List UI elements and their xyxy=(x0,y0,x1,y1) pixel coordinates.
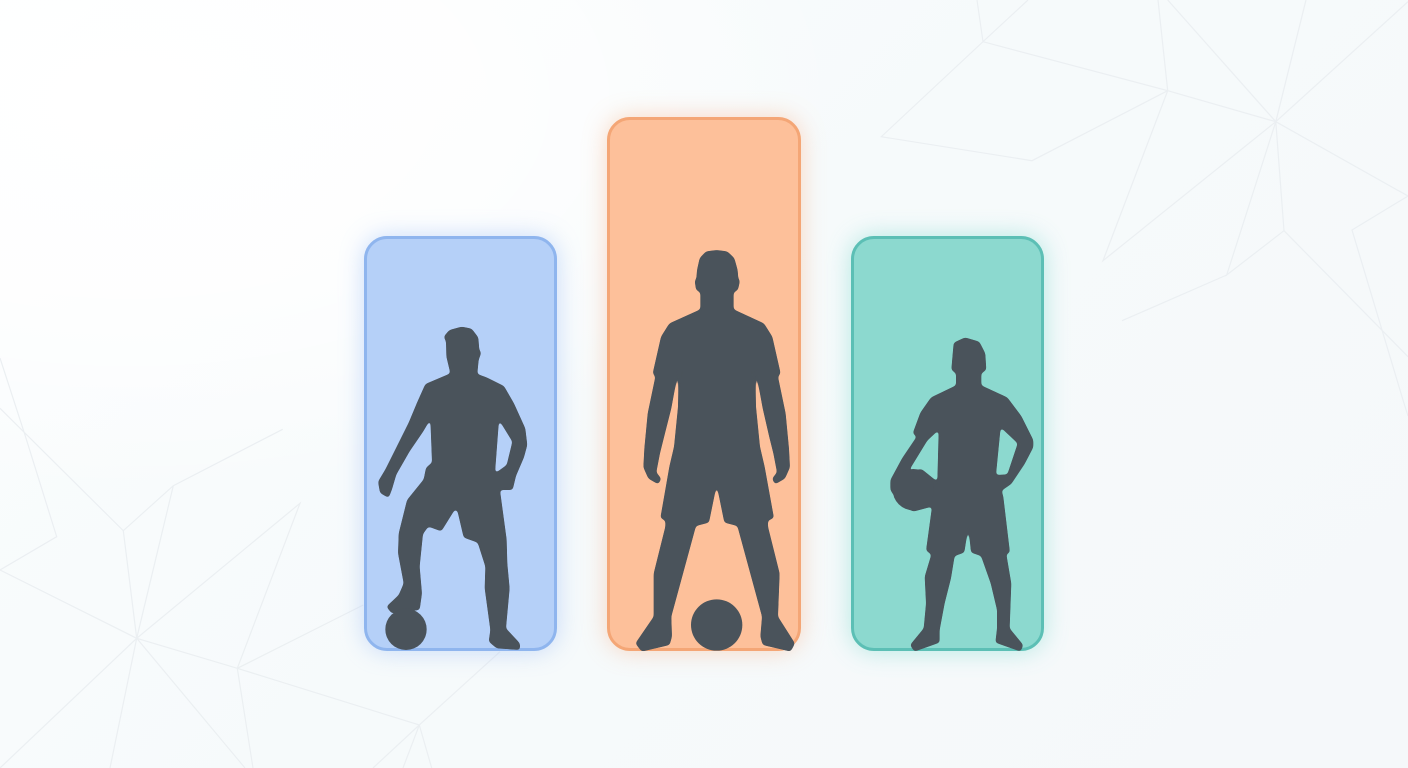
panel: orange player card xyxy=(607,117,801,651)
icon: player with foot on ball xyxy=(378,327,527,650)
silhouette: player three with ball under arm xyxy=(890,337,1033,652)
icon: player holding ball xyxy=(890,337,1033,652)
ball: player three xyxy=(893,469,934,510)
ball: player two xyxy=(691,599,742,651)
ball: player one xyxy=(385,609,427,650)
icon: player standing behind ball xyxy=(635,250,795,652)
panel: teal player card xyxy=(851,236,1044,651)
panel: blue player card xyxy=(364,236,557,651)
silhouette: player one xyxy=(378,327,527,650)
silhouette: player two xyxy=(635,250,795,652)
